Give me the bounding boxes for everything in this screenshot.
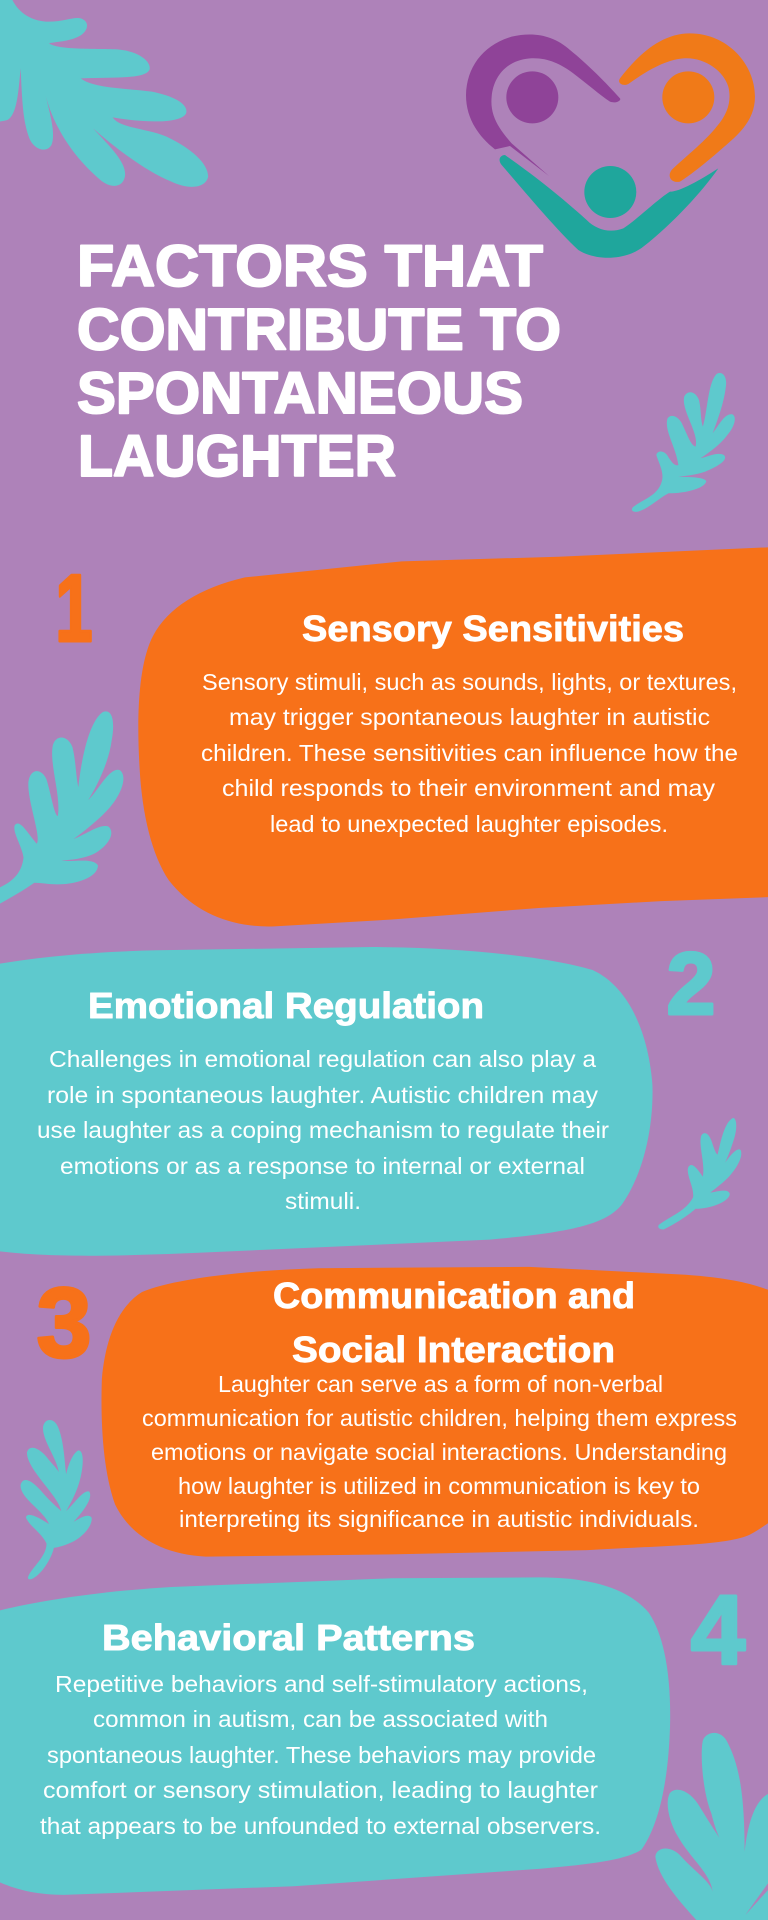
logo: orange arm [619, 33, 755, 182]
panel: emotional regulation [0, 947, 653, 1256]
number 1: 1 [55, 554, 93, 662]
panel 4 background [0, 1577, 670, 1895]
panel 3 body: interpreting its significance in autistic individuals. [179, 1506, 699, 1532]
panel 3 heading [273, 1275, 635, 1370]
panel 3 heading: Communication and [273, 1275, 635, 1316]
logo: purple arm [466, 34, 620, 176]
panel 4 body: common in autism, can be associated with [93, 1706, 548, 1732]
panel 4 body: Repetitive behaviors and self-stimulatory actions, [55, 1671, 588, 1697]
logo: purple head [506, 71, 558, 123]
panel: sensory sensitivities [138, 547, 768, 926]
panel 4 heading: Behavioral Patterns [102, 1617, 475, 1658]
panel 3 body [142, 1371, 737, 1532]
panel 2 body [37, 1046, 609, 1214]
panel 2 body: Challenges in emotional regulation can also play a [49, 1046, 596, 1072]
panel 4 body: comfort or sensory stimulation, leading to laughter [43, 1777, 598, 1803]
title [77, 234, 561, 489]
logo: teal arm [500, 155, 718, 258]
panel 3 body: Laughter can serve as a form of non-verbal [218, 1371, 663, 1397]
icon: bottom-right leaf [655, 1733, 768, 1920]
title: LAUGHTER [78, 424, 396, 489]
icon: leaf beside panel 2 [658, 1118, 741, 1229]
panel 1 background [138, 547, 768, 926]
panel 1 body: child responds to their environment and may [222, 775, 716, 801]
logo: orange head [662, 71, 714, 123]
number 3: 3 [36, 1267, 92, 1378]
icon: leaf beside title [632, 373, 735, 512]
panel 1 body: may trigger spontaneous laughter in autistic [229, 704, 710, 730]
panel 4 body [40, 1671, 601, 1839]
panel 1 heading: Sensory Sensitivities [302, 608, 684, 649]
panel 4 body: spontaneous laughter. These behaviors may provide [47, 1742, 596, 1768]
panel 3 body: emotions or navigate social interactions. Understanding [151, 1439, 727, 1465]
panel 2 body: stimuli. [285, 1188, 361, 1214]
title: CONTRIBUTE TO [77, 298, 561, 362]
panel 3 body: how laughter is utilized in communication is key to [178, 1473, 700, 1499]
panel 4 body: that appears to be unfounded to external observers. [40, 1813, 601, 1839]
panel 3 body: communication for autistic children, helping them express [142, 1405, 737, 1431]
panel 2 body: role in spontaneous laughter. Autistic children may [47, 1082, 599, 1108]
panel 1 body [201, 669, 738, 837]
panel: communication and social interaction [101, 1267, 768, 1557]
icon: leaf beside panel 1 [0, 711, 123, 920]
title: FACTORS THAT [77, 234, 543, 299]
panel 3 background [101, 1267, 768, 1557]
panel 2 body: emotions or as a response to internal or external [60, 1153, 585, 1179]
icon: top-left leaf [0, 0, 208, 187]
panel 1 body: Sensory stimuli, such as sounds, lights, or textures, [202, 669, 737, 695]
logo: heart of three figures [466, 33, 755, 258]
panel 1 body: children. These sensitivities can influence how the [201, 740, 738, 766]
title: SPONTANEOUS [77, 361, 523, 426]
number 4: 4 [691, 1575, 745, 1685]
logo: teal head [584, 166, 636, 218]
panel 3 heading: Social Interaction [292, 1329, 615, 1370]
number 2: 2 [667, 934, 715, 1033]
panel: behavioral patterns [0, 1577, 670, 1895]
panel 2 background [0, 947, 653, 1256]
panel 2 body: use laughter as a coping mechanism to regulate their [37, 1117, 609, 1143]
panel 2 heading: Emotional Regulation [88, 985, 484, 1026]
panel 1 body: lead to unexpected laughter episodes. [270, 811, 668, 837]
icon: leaf beside panel 3 [21, 1420, 92, 1579]
